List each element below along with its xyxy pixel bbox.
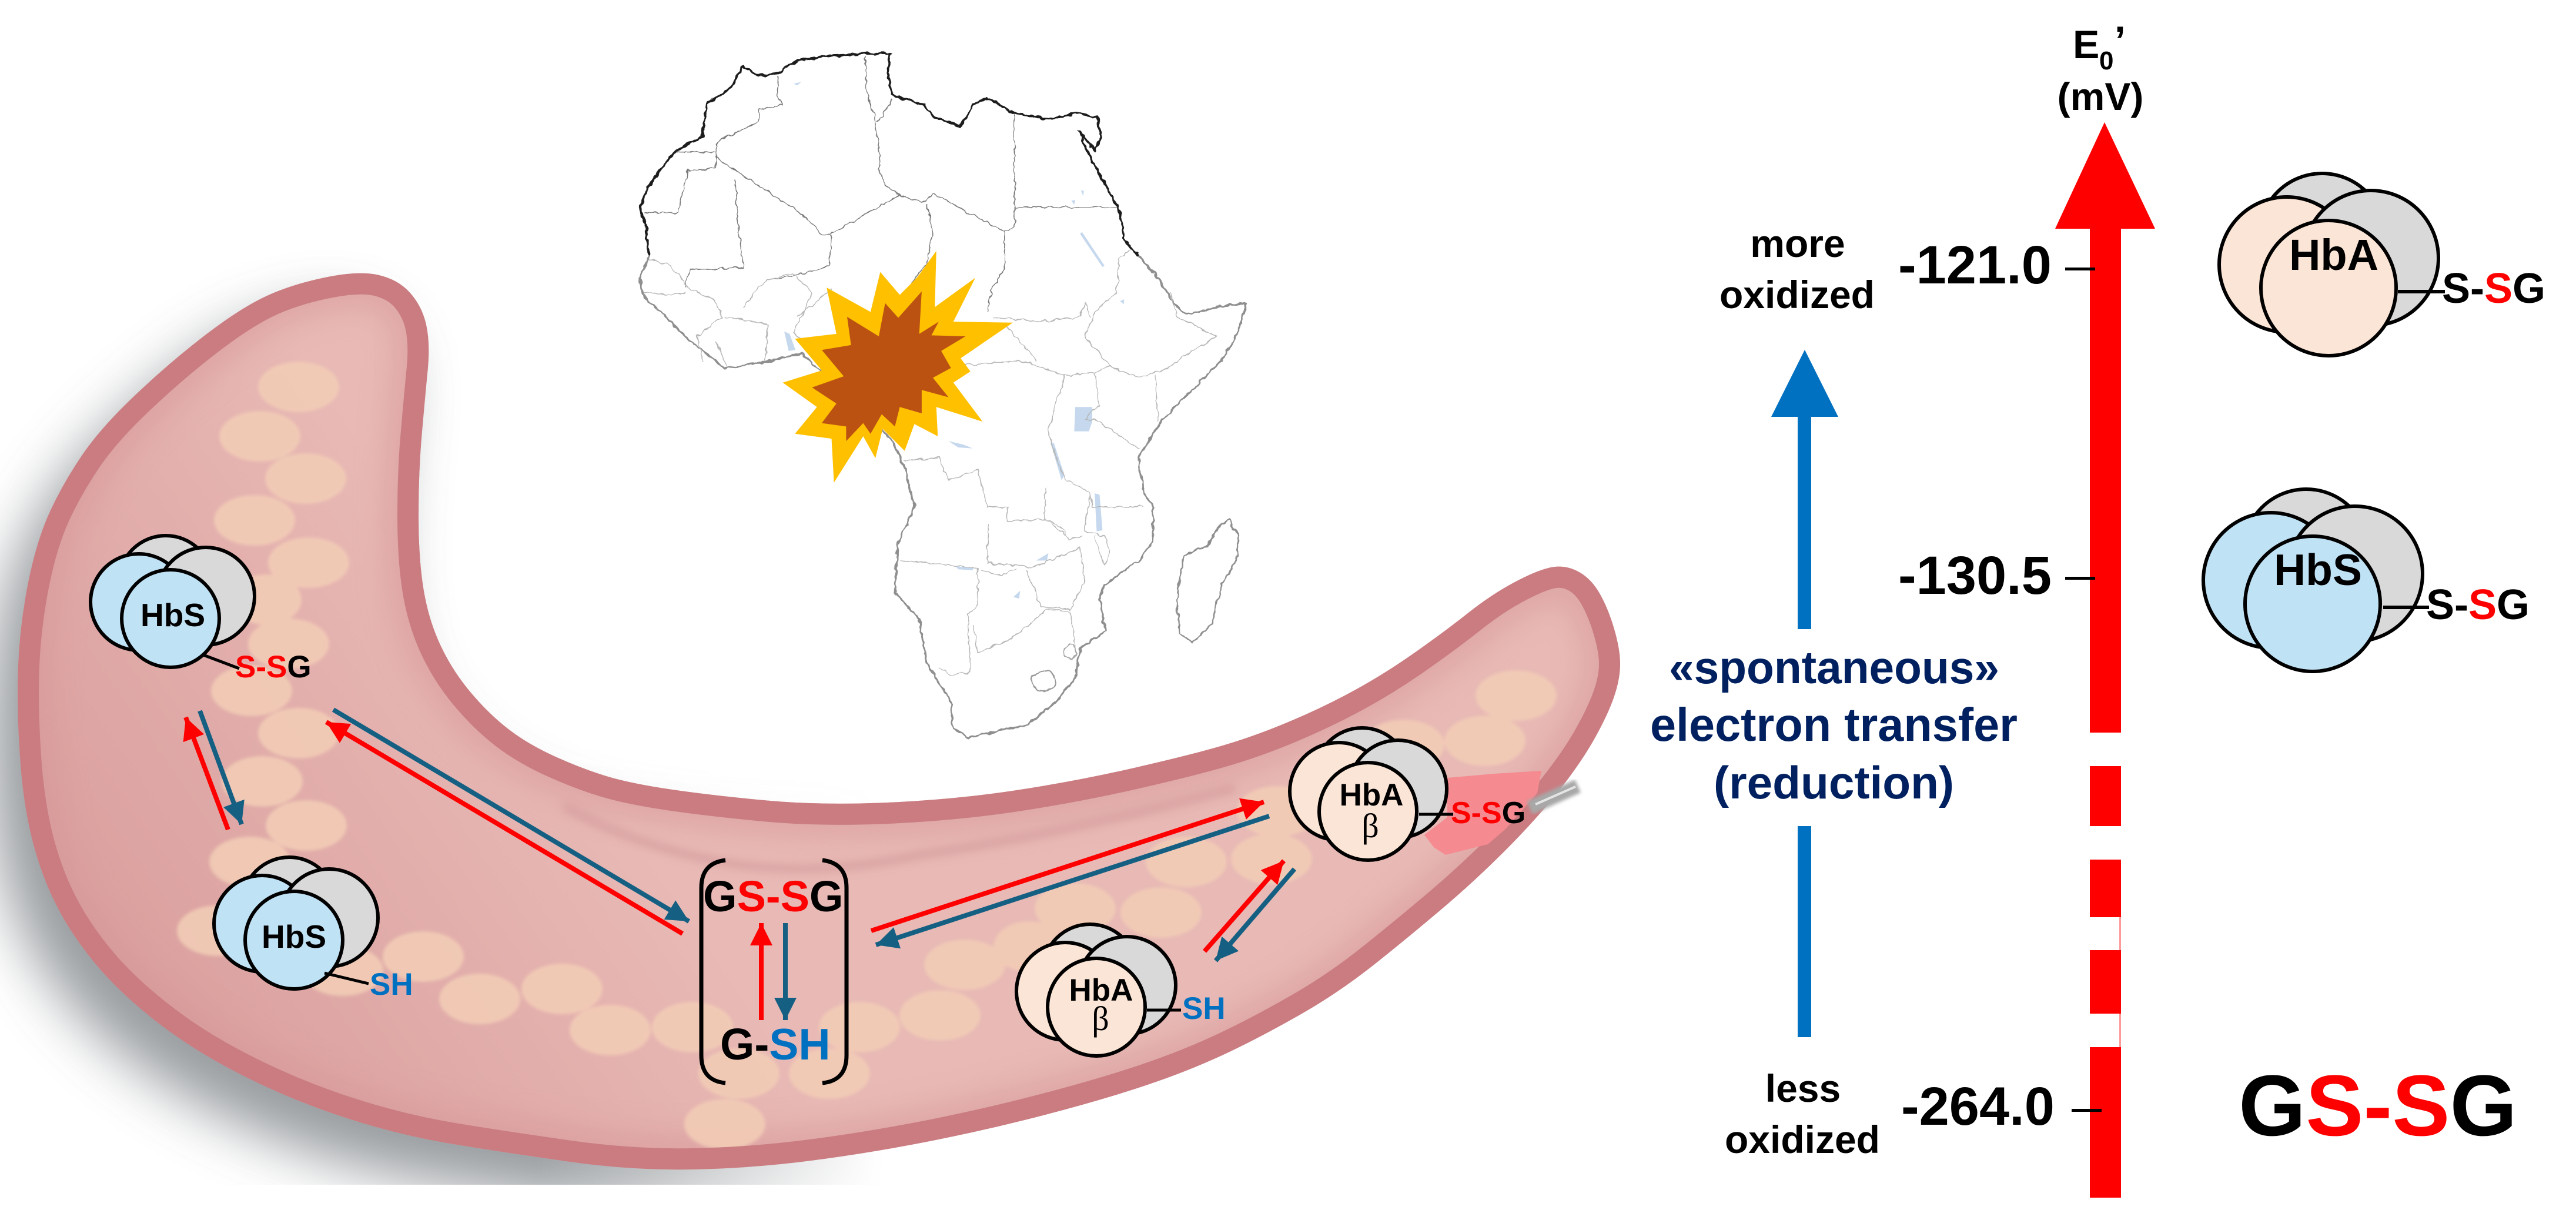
HbA beta with SH (in cell): HbA (1069, 973, 1133, 1008)
text: spontaneous electron transfer (reduction) (1650, 641, 2018, 808)
lakes (784, 82, 1124, 599)
HbA beta with SH (in cell) (1016, 924, 1226, 1056)
value: -130.5: -130.5 (1898, 546, 2052, 606)
HbS with S-SG (in cell) (91, 536, 312, 684)
HbS with SH (in cell) (214, 857, 413, 1002)
HbA-SSG legend molecule (2219, 173, 2545, 356)
label: more oxidized: more (1750, 222, 1845, 265)
text: spontaneous electron transfer (reduction): (reduction) (1714, 757, 1954, 808)
arrow pair: HbA-SH and HbA-SSG (1205, 861, 1294, 961)
granules inside the cell (177, 362, 1557, 1149)
HbS with S-SG (in cell): S-SG (235, 650, 312, 684)
axis title: E0' (mV): E (2073, 22, 2099, 67)
axis title: E0' (mV) (2058, 18, 2143, 118)
arrow pair: HbS-SSG and HbS-SH (186, 711, 242, 830)
text: spontaneous electron transfer (reduction): «spontaneous» (1669, 641, 1999, 693)
HbS-SSG legend molecule: S-SG (2426, 581, 2530, 629)
blue arrow: direction of spontaneous electron transfer (1771, 350, 1838, 1037)
HbA beta with S-SG (in cell): β (1361, 807, 1379, 845)
arrow pair: glutathione and HbA (871, 802, 1269, 945)
glutathione equilibrium in brackets: GS-SG (703, 872, 843, 921)
HbS with SH (in cell): SH (370, 967, 413, 1002)
southern coastline (639, 256, 1246, 737)
label: more oxidized: oxidized (1719, 273, 1875, 316)
HbS with S-SG (in cell): HbS (140, 597, 205, 633)
northern borders (644, 56, 1116, 312)
value: -121.0: -121.0 (1898, 235, 2052, 295)
Madagascar (1176, 519, 1239, 643)
southern borders (644, 249, 1216, 675)
sickle red blood cell (0, 273, 1620, 1206)
HbS-SSG legend molecule (2203, 489, 2530, 671)
axis title: E0' (mV): (mV) (2058, 75, 2143, 118)
glutathione equilibrium in brackets (701, 860, 847, 1083)
HbA beta with SH (in cell): SH (1182, 991, 1226, 1026)
text: spontaneous electron transfer (reduction): electron transfer (1650, 698, 2018, 751)
label: less oxidized: less (1765, 1067, 1841, 1110)
HbA beta with SH (in cell): β (1092, 1000, 1109, 1038)
value: -264.0: -264.0 (1901, 1077, 2055, 1137)
HbS-SSG legend molecule: HbS (2274, 545, 2362, 594)
red redox potential axis arrow with breaks (2055, 122, 2155, 1198)
HbS with SH (in cell): HbS (262, 918, 326, 955)
HbA-SSG legend molecule: S-SG (2442, 265, 2545, 312)
axis title: E0' (mV): 0 (2099, 46, 2113, 75)
glutathione equilibrium in brackets: G-SH (720, 1020, 831, 1069)
HbA-SSG legend molecule: HbA (2289, 230, 2378, 279)
label: less oxidized: oxidized (1725, 1118, 1880, 1161)
map of Africa (639, 54, 1246, 737)
arrow pair: HbS and glutathione (326, 710, 689, 934)
label: less oxidized (1725, 1067, 1880, 1161)
HbA beta with S-SG (in cell): HbA (1340, 778, 1403, 813)
explosion marker (783, 251, 1013, 483)
GS-SG large label: GS-SG (2239, 1058, 2517, 1154)
HbA beta with S-SG (in cell): S-SG (1451, 796, 1525, 830)
HbA beta with S-SG (in cell) (1290, 728, 1525, 860)
northern coastline (641, 54, 1139, 256)
axis title: E0' (mV): ’ (2115, 18, 2126, 63)
label: more oxidized (1719, 222, 1875, 316)
